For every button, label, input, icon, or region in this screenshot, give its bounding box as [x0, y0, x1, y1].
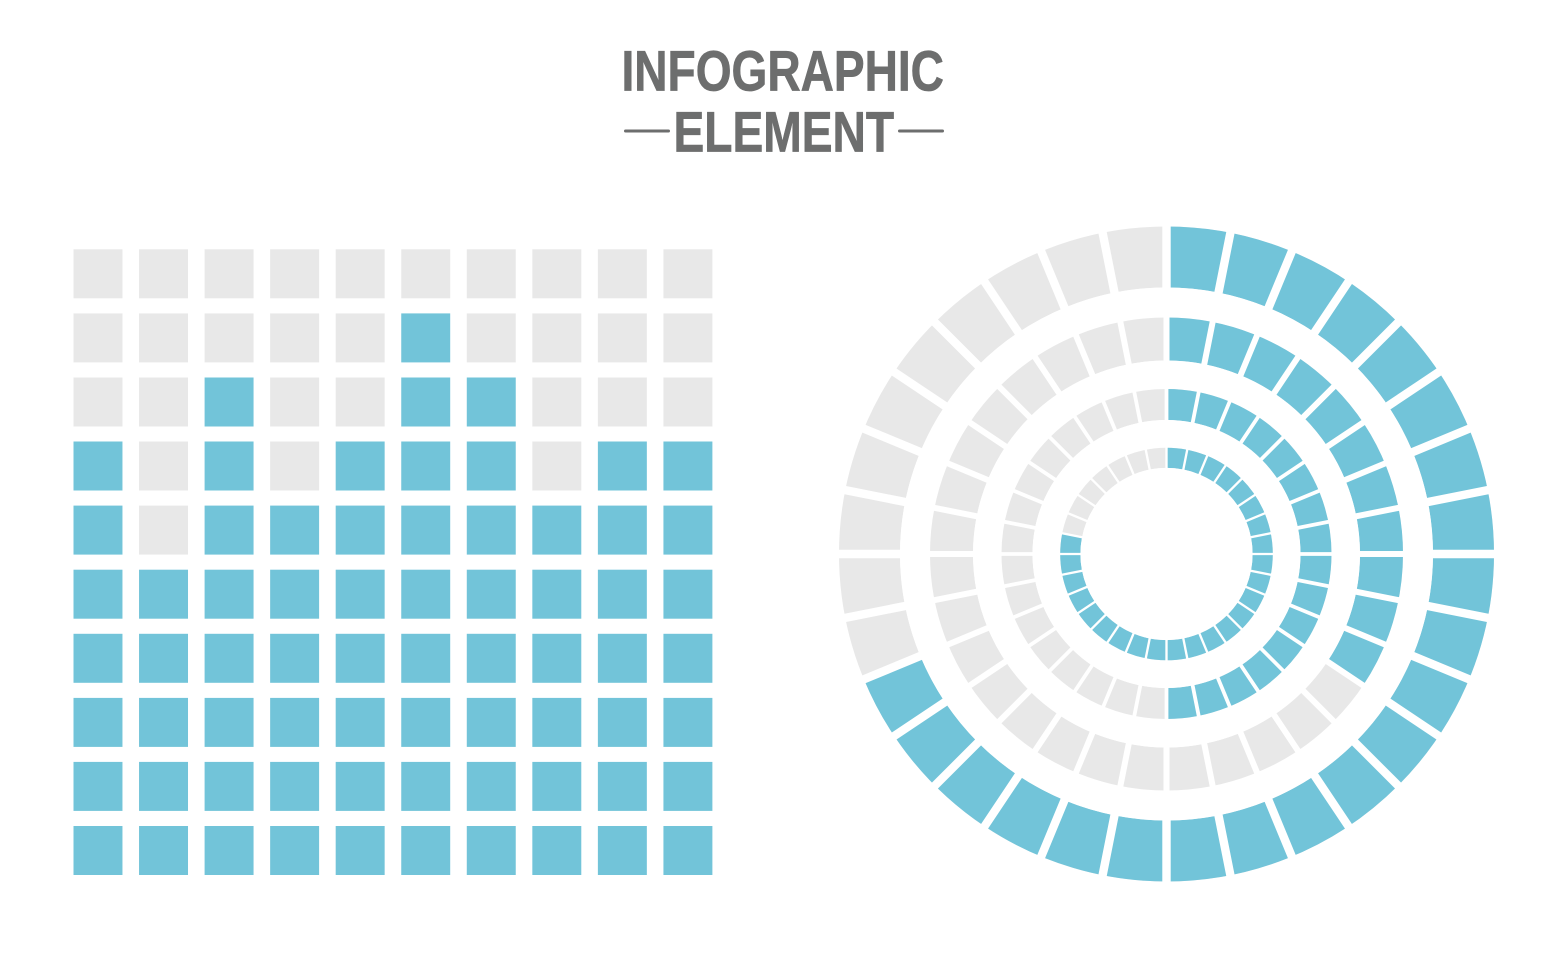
grid row 1: [74, 249, 712, 298]
title line: INFOGRAPHIC: INFOGRAPHIC: [622, 40, 944, 104]
grid row 6: [74, 570, 712, 619]
grid row 8: [74, 698, 712, 747]
ring 4: innermost, 25 of 32 segments filled: [1058, 445, 1276, 663]
grid row 7: [74, 634, 712, 683]
ring 1: outermost, 22 of 32 segments filled: [834, 222, 1498, 886]
waffle chart: 10 by 10 grid of squares: [74, 249, 712, 875]
grid row 3: [74, 378, 712, 426]
ring 3: 16 of 32 segments filled: [998, 386, 1334, 722]
grid row 9: [74, 762, 712, 811]
grid row 5: [74, 506, 712, 555]
radial chart: four concentric segmented rings: [834, 222, 1498, 886]
grid row 10: [74, 826, 712, 875]
left title rule: [626, 130, 668, 132]
ring 2: 11 of 32 segments filled: [926, 314, 1406, 794]
title: [622, 40, 944, 164]
grid row 2: [74, 313, 712, 362]
title line: ELEMENT: ELEMENT: [674, 100, 894, 164]
right title rule: [900, 130, 942, 132]
grid row 4: [74, 442, 712, 490]
